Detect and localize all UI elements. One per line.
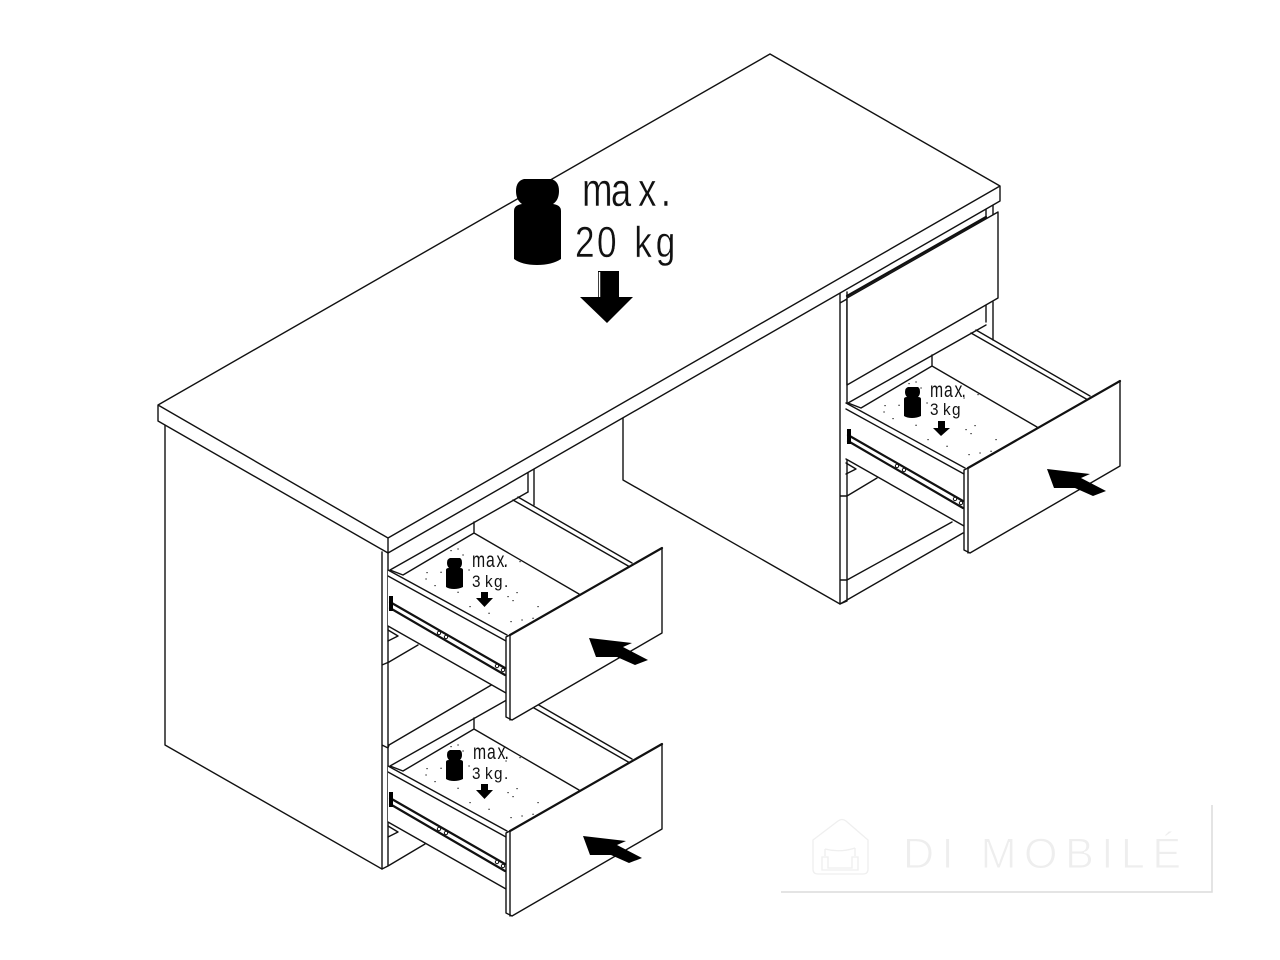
drawer side lines: [388, 766, 507, 889]
3 kg text: 3 kg: [930, 400, 960, 419]
drawer interior lines: [390, 688, 632, 790]
right pedestal upper closed drawer: [847, 212, 998, 385]
icon: large weight: [514, 179, 561, 265]
lower shelf lines: [846, 463, 856, 474]
arrow: load down: [476, 784, 493, 799]
lower left open drawer: [388, 688, 662, 916]
arrow highlight sliver: [598, 272, 600, 297]
drawer front top edge: [510, 744, 662, 831]
lower bay shelf line: [388, 630, 505, 745]
left side panel: [165, 425, 382, 869]
3 kg text: 3 kg.: [472, 572, 508, 591]
max text: max.: [930, 378, 966, 402]
desk top slab: [158, 54, 1000, 553]
watermark text: DI MOBILÉ: [903, 830, 1181, 878]
drawer front left edge: [509, 635, 511, 720]
arrow: load down: [580, 271, 633, 323]
20 kg text: 20 kg: [575, 218, 675, 267]
runner upper rail: [848, 435, 963, 501]
drawer side lines: [846, 403, 965, 526]
icon: house with sofa: [813, 820, 868, 874]
drawer front top edge: [510, 548, 662, 635]
drawer side: [846, 403, 965, 526]
rear panel and pedestal edges: [623, 203, 993, 604]
desk top load label: max. 20 kg: [514, 164, 675, 323]
left pedestal front edges: [382, 468, 534, 869]
drawer front: [506, 548, 662, 720]
drawer interior lines: [390, 492, 632, 594]
runner lower rail: [390, 608, 505, 675]
icon: weight: [904, 387, 921, 418]
rear modesty panel edge: [623, 418, 840, 604]
upper left open drawer: [388, 492, 662, 745]
3 kg text: 3 kg.: [472, 764, 508, 783]
drawer side lines: [388, 570, 507, 693]
lower left drawer load label: [446, 740, 509, 799]
icon: weight: [446, 750, 463, 781]
arrow: push lower left drawer closed: [583, 836, 642, 863]
drawer side: [388, 570, 507, 693]
arrow: load down: [476, 592, 493, 607]
drawer front left edge: [967, 468, 969, 553]
watermark frame: [781, 805, 1212, 892]
drawer top shadow line: [847, 217, 986, 296]
drawer interior lines: [848, 325, 1090, 427]
runner lower rail: [848, 441, 963, 508]
right pedestal back posts: [986, 203, 993, 340]
right pedestal front edges: [840, 292, 963, 604]
max text: max.: [472, 548, 508, 572]
right drawer load label: [904, 378, 966, 436]
icon: weight: [446, 558, 463, 589]
lower shelf lines: [388, 826, 398, 837]
right open drawer: [846, 325, 1120, 553]
upper left drawer load label: [446, 548, 508, 607]
watermark: DI MOBILÉ logo: [781, 805, 1212, 892]
runner rollers: [895, 464, 963, 505]
arrow: load down: [933, 421, 950, 436]
runner rollers: [437, 827, 505, 868]
max text: max.: [473, 740, 509, 764]
arrow: push right drawer closed: [1047, 469, 1106, 496]
drawer front: [506, 744, 662, 916]
arrow: push upper left drawer closed: [589, 638, 648, 665]
drawer front left edge: [509, 831, 511, 916]
runner rollers: [437, 631, 505, 672]
drawer front top edge: [968, 381, 1120, 468]
floor speckles: [426, 549, 538, 622]
runner upper rail: [390, 798, 505, 864]
runner end block: [389, 792, 393, 807]
floor speckles: [426, 745, 538, 818]
floor speckles: [884, 382, 996, 455]
runner end block: [389, 596, 393, 611]
runner lower rail: [390, 804, 505, 871]
max text: max.: [582, 164, 671, 216]
runner end block: [847, 429, 851, 444]
drawer front: [964, 381, 1120, 553]
runner upper rail: [390, 602, 505, 668]
drawer side: [388, 766, 507, 889]
